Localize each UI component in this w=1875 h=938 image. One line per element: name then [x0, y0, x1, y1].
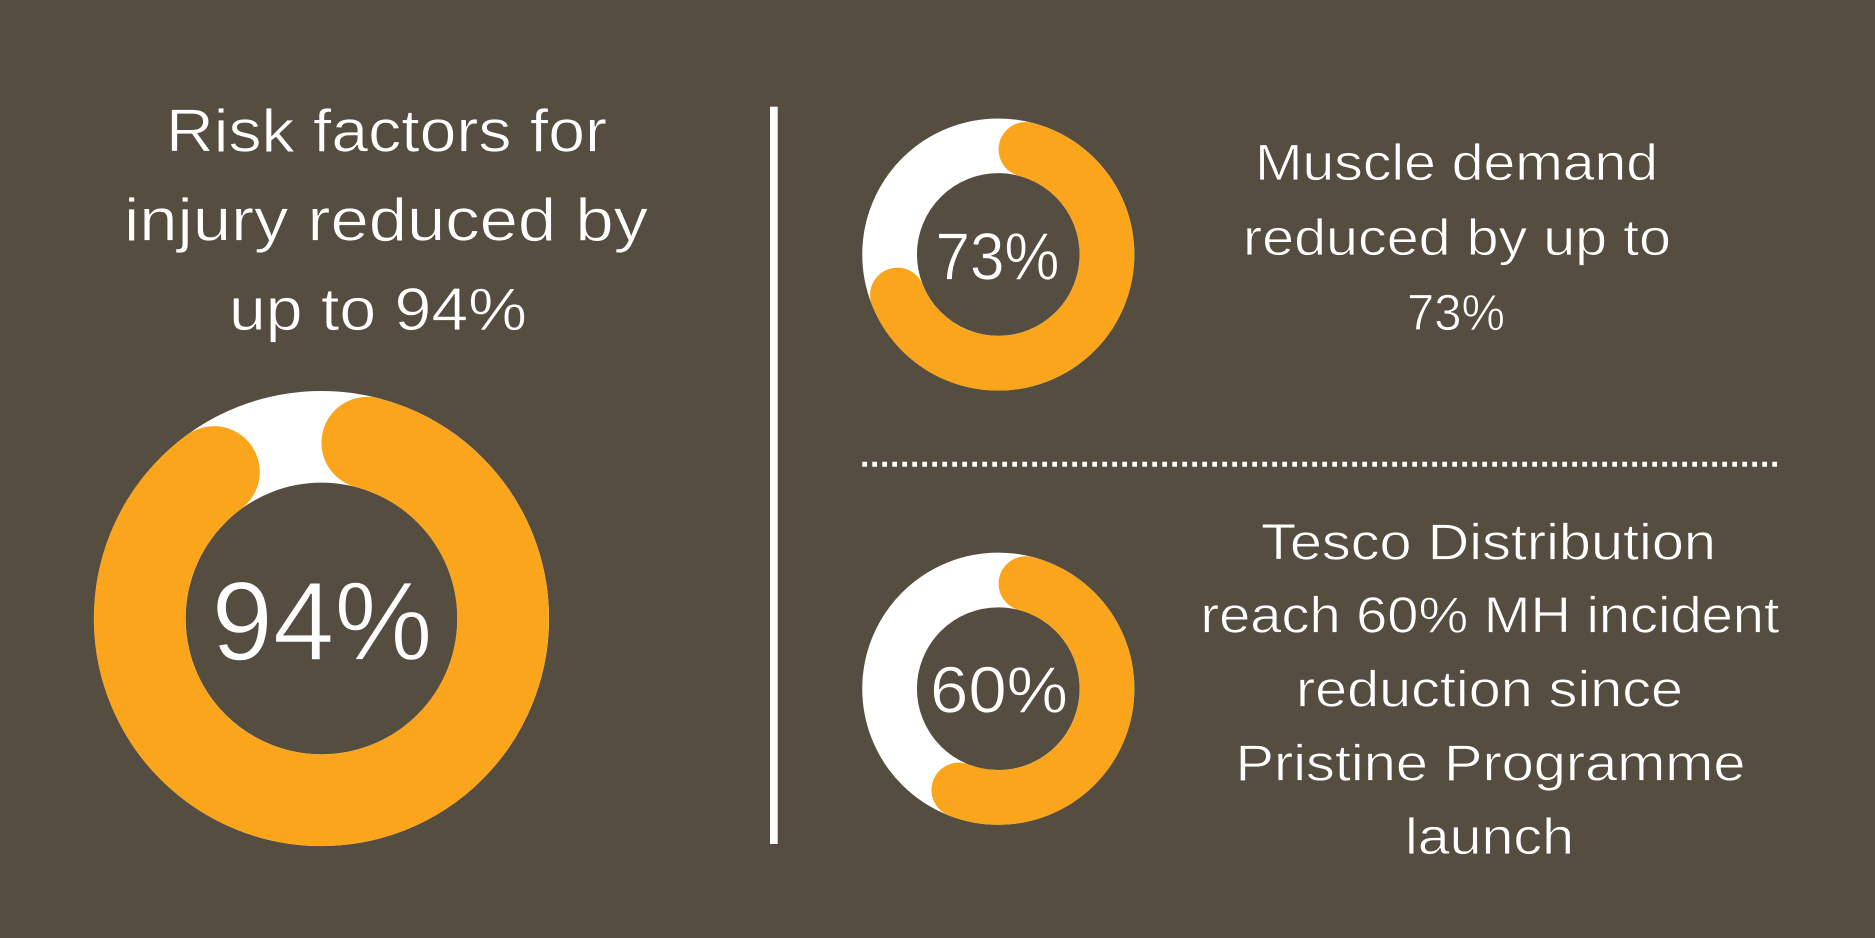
heading: risk factors: up to 94%	[229, 276, 527, 343]
text block: tesco distribution	[1200, 513, 1780, 865]
text block: muscle demand: Muscle demand	[1255, 134, 1658, 191]
text block: muscle demand	[1243, 134, 1671, 341]
text block: muscle demand: reduced by up to	[1243, 209, 1671, 266]
heading: risk factors: injury reduced by	[124, 187, 648, 254]
heading: risk factors: Risk factors for	[166, 98, 607, 165]
donut chart: 60%: 60%	[930, 653, 1068, 727]
text block: tesco distribution: Tesco Distribution	[1261, 513, 1716, 570]
vertical divider	[770, 107, 778, 844]
heading: risk factors	[124, 98, 648, 343]
text block: tesco distribution: reach 60% MH incident	[1200, 587, 1780, 644]
donut chart: 60%	[890, 580, 1107, 797]
text block: tesco distribution: launch	[1405, 808, 1574, 865]
donut chart: 73%	[890, 146, 1107, 363]
donut chart: 94%	[140, 437, 503, 800]
dotted divider	[862, 462, 1777, 467]
donut chart: 94%: 94%	[212, 559, 432, 684]
donut chart: 73%: 73%	[936, 219, 1060, 294]
text block: muscle demand: 73%	[1407, 284, 1505, 341]
text block: tesco distribution: Pristine Programme	[1236, 735, 1746, 792]
text block: tesco distribution: reduction since	[1296, 661, 1683, 718]
